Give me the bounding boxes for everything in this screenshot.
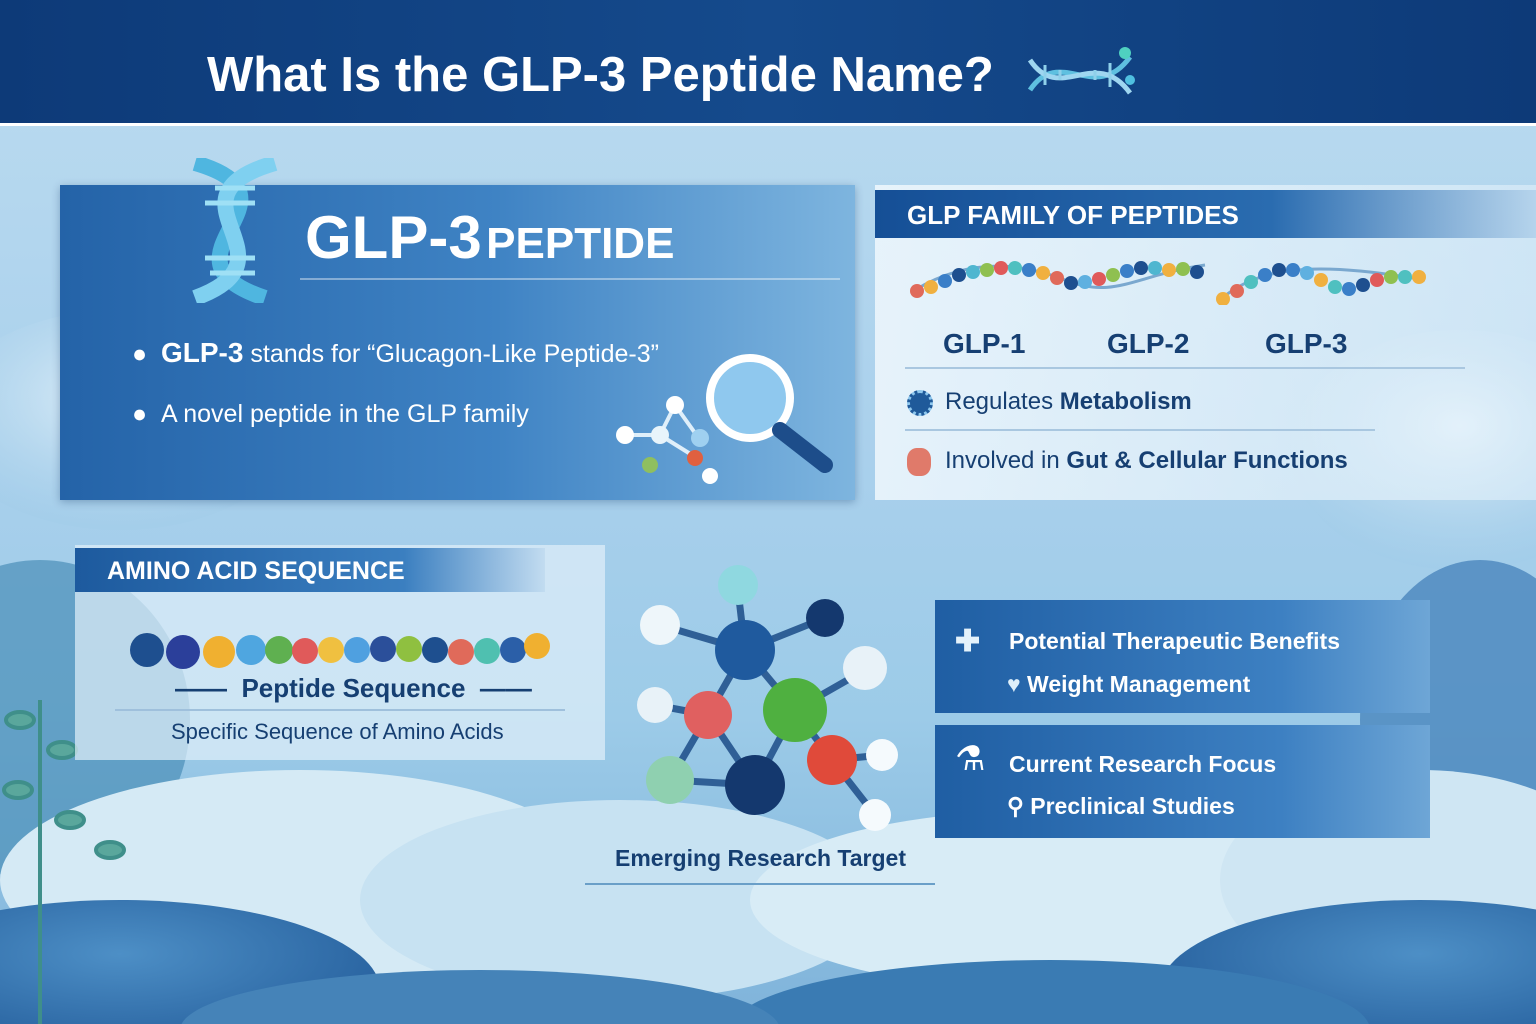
row: gut: Involved in Gut & Cellular Functions [945, 447, 1348, 474]
molecule [637, 565, 898, 831]
box: therapeutic benefits [935, 600, 1430, 713]
box: research focus [935, 725, 1430, 838]
plant [4, 700, 124, 1024]
box: therapeutic benefits: Potential Therapeutic Benefits [1009, 628, 1340, 654]
panel: GLP family: GLP-3 [1265, 328, 1347, 359]
heading: GLP-3 PEPTIDE [305, 204, 674, 271]
panel: GLP family [875, 185, 1536, 500]
box: therapeutic benefits: ♥ Weight Management [1007, 671, 1250, 697]
header band: GLP FAMILY OF PEPTIDES [907, 200, 1239, 230]
box: research focus: ⚗ [955, 740, 985, 778]
box: therapeutic benefits: ✚ [955, 625, 980, 658]
bead chains [910, 261, 1426, 305]
box: research focus: ⚲ Preclinical Studies [1007, 793, 1235, 819]
panel: amino acid sequence: AMINO ACID SEQUENCE [107, 557, 405, 585]
caption: emerging research target: Emerging Research Target [615, 845, 906, 871]
label peptide sequence: —— Peptide Sequence —— [175, 673, 532, 703]
icon: dna [192, 158, 278, 303]
beads [130, 633, 550, 669]
row: metabolism: Regulates Metabolism [945, 388, 1192, 415]
bullet 1: ● GLP-3 stands for “Glucagon-Like Peptide-3” [132, 337, 659, 368]
title: What Is the GLP-3 Peptide Name? [207, 48, 994, 102]
icon: title dna [1028, 47, 1135, 94]
box: research focus: Current Research Focus [1009, 751, 1276, 777]
panel: GLP family: GLP-2 [1107, 328, 1189, 359]
panel: amino acid sequence [75, 545, 605, 760]
header band [0, 0, 1536, 126]
icon: magnifier molecule [616, 354, 833, 484]
panel: GLP-3 peptide [60, 185, 855, 500]
text: Specific Sequence of Amino Acids [171, 719, 504, 744]
labels GLP-1/2/3: GLP-1 [943, 328, 1025, 359]
header band [875, 190, 1536, 238]
bullet 2: ● A novel peptide in the GLP family [132, 400, 529, 428]
